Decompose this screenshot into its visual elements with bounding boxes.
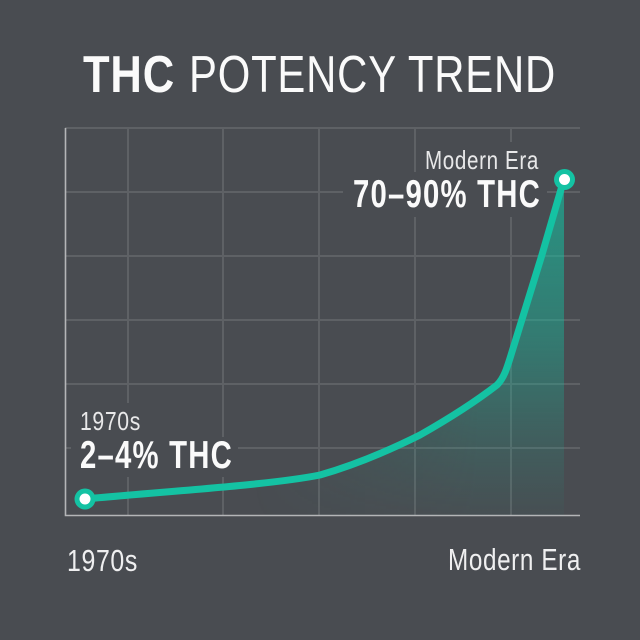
axes xyxy=(66,128,580,516)
title: THC xyxy=(83,46,175,104)
label: modern era value xyxy=(353,145,541,216)
chart xyxy=(65,128,581,578)
label: modern era value: 70–90% THC xyxy=(353,173,541,216)
title: POTENCY TREND xyxy=(189,46,556,104)
label backdrop: 1970s xyxy=(71,403,238,477)
label: 1970s value: 2–4% THC xyxy=(80,434,233,477)
infographic canvas xyxy=(64,56,580,572)
grid lines xyxy=(65,128,580,515)
trend line xyxy=(85,179,564,499)
area under curve xyxy=(382,192,564,494)
label backdrop: modern era xyxy=(343,142,547,217)
label: 1970s value: 1970s xyxy=(80,406,141,436)
label: modern era value: Modern Era xyxy=(425,145,539,175)
label: 1970s value xyxy=(80,406,233,477)
x axis label: end: Modern Era xyxy=(448,542,581,577)
x axis label: start: 1970s xyxy=(67,543,138,578)
end marker xyxy=(554,169,575,190)
start marker xyxy=(74,488,96,510)
